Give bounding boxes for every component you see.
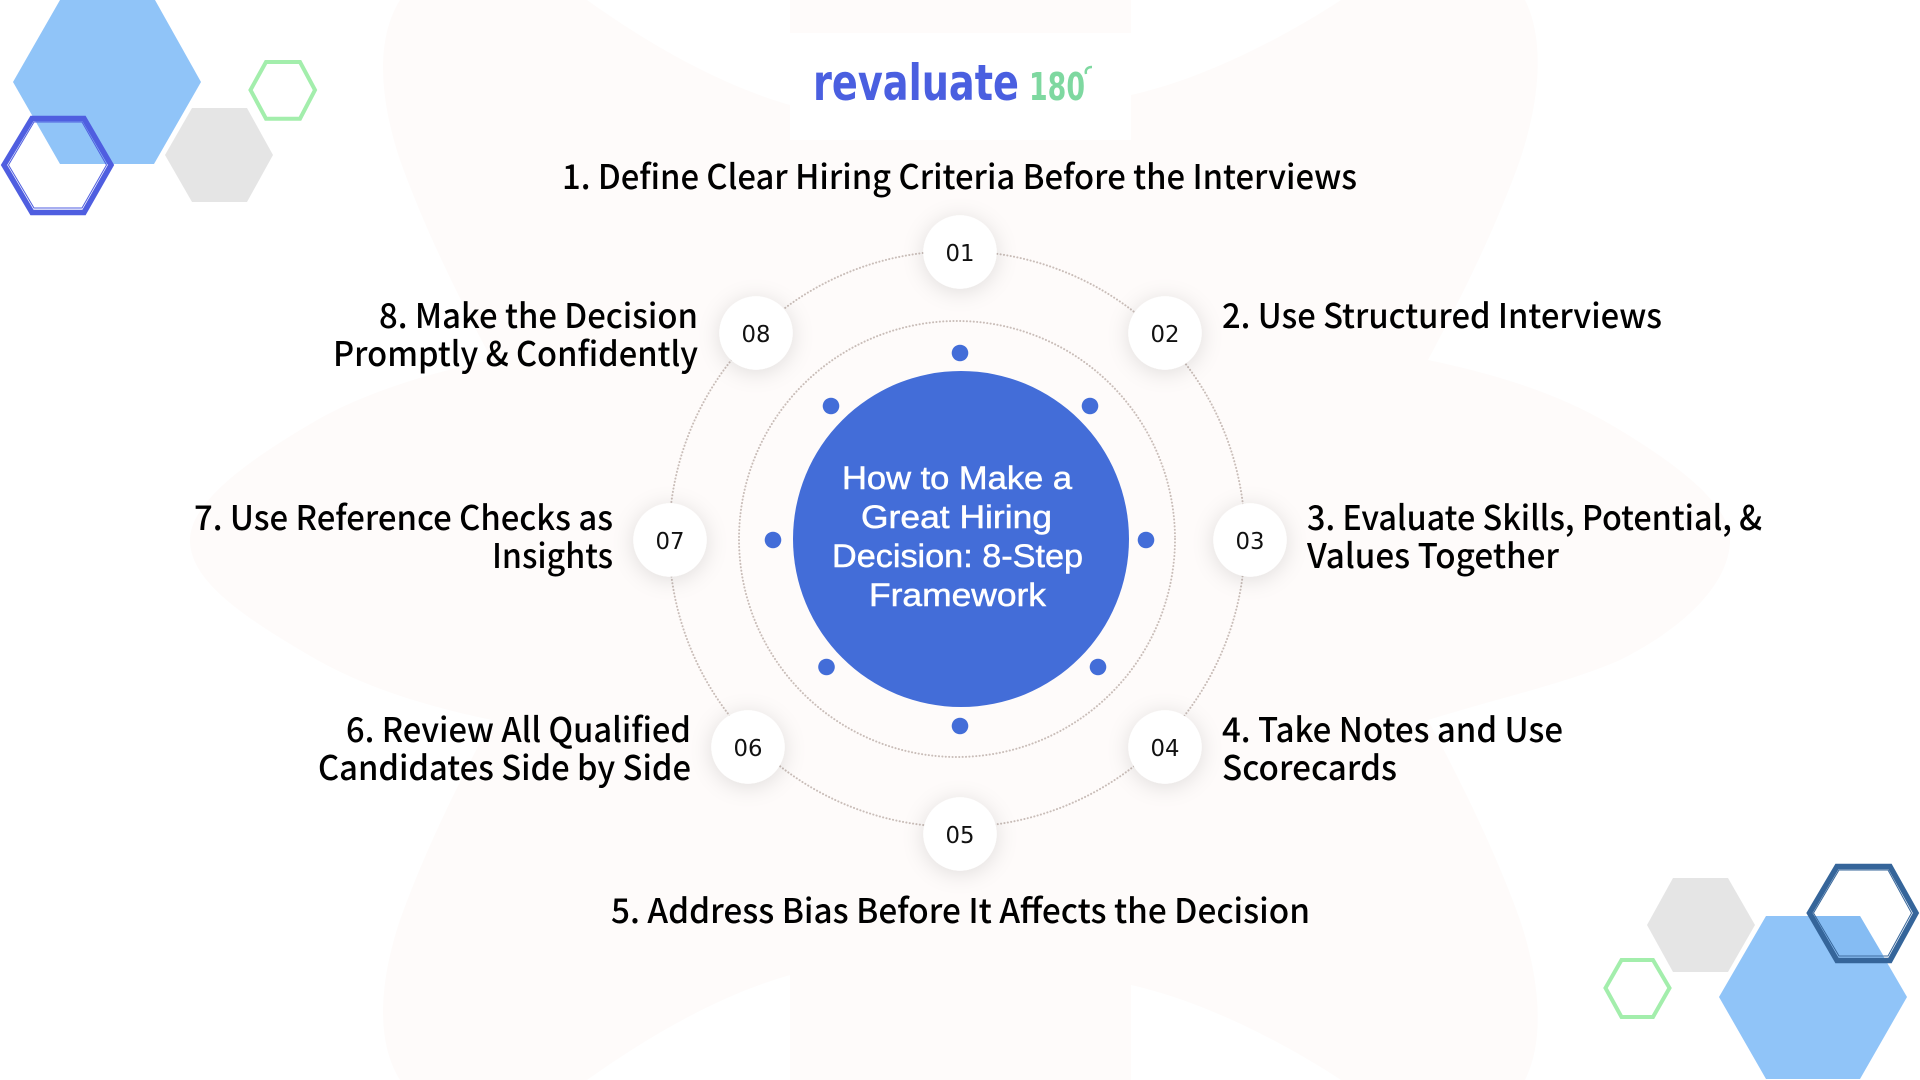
step 7 label xyxy=(194,491,613,578)
step 8 label: 8. Make the Decision xyxy=(379,289,698,338)
node 05: 05 xyxy=(946,823,974,849)
node 08 xyxy=(719,296,793,370)
node 04: 04 xyxy=(1150,736,1180,762)
node 07 xyxy=(633,503,707,577)
central title: Great Hiring xyxy=(861,499,1052,535)
logo: revaluate 180 xyxy=(790,33,1131,140)
node 03: 03 xyxy=(1236,529,1264,555)
hexagon cluster: top left xyxy=(4,0,315,212)
step 6 label: 6. Review All Qualified xyxy=(346,703,691,752)
node 07: 07 xyxy=(656,529,684,555)
step 3 label: Values Together xyxy=(1306,529,1559,578)
central title xyxy=(832,460,1083,613)
node 03 xyxy=(1213,503,1287,577)
step 1 label: 1. Define Clear Hiring Criteria Before the Interviews xyxy=(562,150,1357,199)
step 2 label: 2. Use Structured Interviews xyxy=(1222,289,1662,338)
step 3 label xyxy=(1306,491,1762,578)
step 4 label xyxy=(1222,703,1563,790)
step 3 label: 3. Evaluate Skills, Potential, & xyxy=(1307,491,1762,540)
node 06: 06 xyxy=(734,736,762,762)
step 6 label xyxy=(318,703,691,790)
step 4 label: 4. Take Notes and Use xyxy=(1222,703,1563,752)
step 4 label: Scorecards xyxy=(1222,741,1397,790)
node 02 xyxy=(1128,296,1202,370)
step 8 label xyxy=(333,289,698,376)
step 7 label: Insights xyxy=(492,529,613,578)
central circle xyxy=(793,371,1129,707)
logo: revaluate 180: 180 xyxy=(1029,65,1085,109)
node 04 xyxy=(1128,710,1202,784)
step 7 label: 7. Use Reference Checks as xyxy=(194,491,613,540)
inner dots xyxy=(765,345,1154,734)
node 05 xyxy=(923,797,997,871)
node 06 xyxy=(711,710,785,784)
node 08: 08 xyxy=(742,322,770,348)
hexagon cluster: bottom right xyxy=(1606,866,1916,1079)
logo: revaluate 180: revaluate xyxy=(813,54,1019,112)
central title: How to Make a xyxy=(842,460,1072,496)
step 6 label: Candidates Side by Side xyxy=(318,741,691,790)
step 5 label: 5. Address Bias Before It Affects the Decision xyxy=(611,884,1310,933)
node 02: 02 xyxy=(1150,322,1180,348)
node 01: 01 xyxy=(946,241,974,267)
node 01 xyxy=(923,215,997,289)
step nodes xyxy=(633,215,1287,871)
dotted orbit rings xyxy=(669,251,1245,827)
step 8 label: Promptly & Confidently xyxy=(333,327,698,376)
central title: Decision: 8-Step xyxy=(832,538,1083,574)
central title: Framework xyxy=(869,577,1047,613)
